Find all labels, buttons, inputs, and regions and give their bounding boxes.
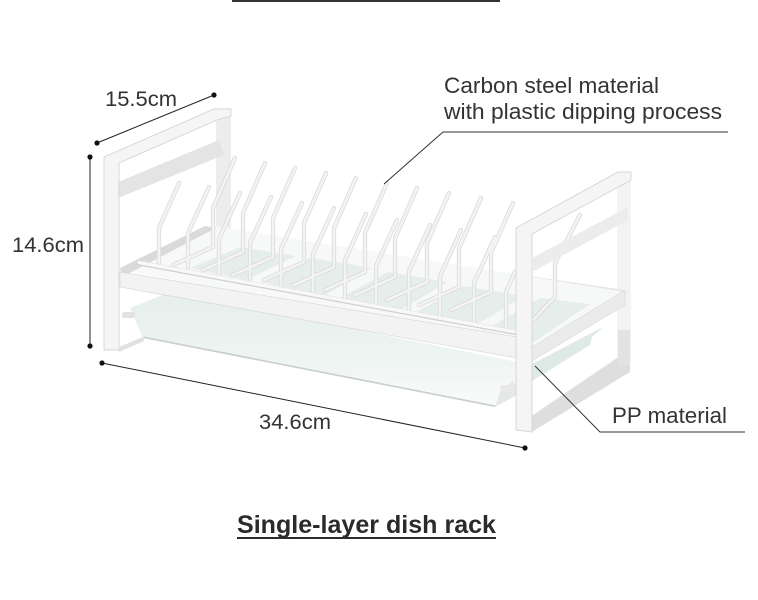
dimension: width 15.5cm: 15.5cm	[105, 88, 177, 111]
callout: PP material	[535, 366, 745, 432]
front rod	[139, 262, 518, 333]
dimension: height 14.6cm	[12, 154, 93, 349]
dimension: length 34.6cm: 34.6cm	[259, 411, 331, 434]
callout: carbon steel material: with plastic dipping process	[443, 99, 722, 124]
drip tray	[122, 292, 603, 407]
rear tray band	[200, 228, 625, 304]
callout: carbon steel material	[384, 73, 728, 184]
inner rack floor	[122, 226, 625, 347]
product: dish rack	[104, 108, 631, 433]
front band	[120, 272, 517, 358]
title: single-layer dish rack: Single-layer dish rack	[237, 511, 496, 539]
tines	[159, 158, 580, 328]
right frame front	[516, 172, 631, 432]
callout: carbon steel material: Carbon steel material	[444, 73, 659, 98]
dimension: height 14.6cm: 14.6cm	[12, 234, 84, 257]
dimension: width 15.5cm	[94, 88, 217, 146]
floor slats	[190, 247, 590, 342]
side rail right	[532, 290, 625, 361]
left frame back post	[118, 108, 231, 262]
dimension: length 34.6cm	[99, 360, 528, 451]
callout: PP material: PP material	[612, 403, 727, 428]
right frame back post and lower bar	[530, 171, 631, 433]
side rail left	[120, 226, 216, 277]
left frame front	[104, 109, 231, 352]
